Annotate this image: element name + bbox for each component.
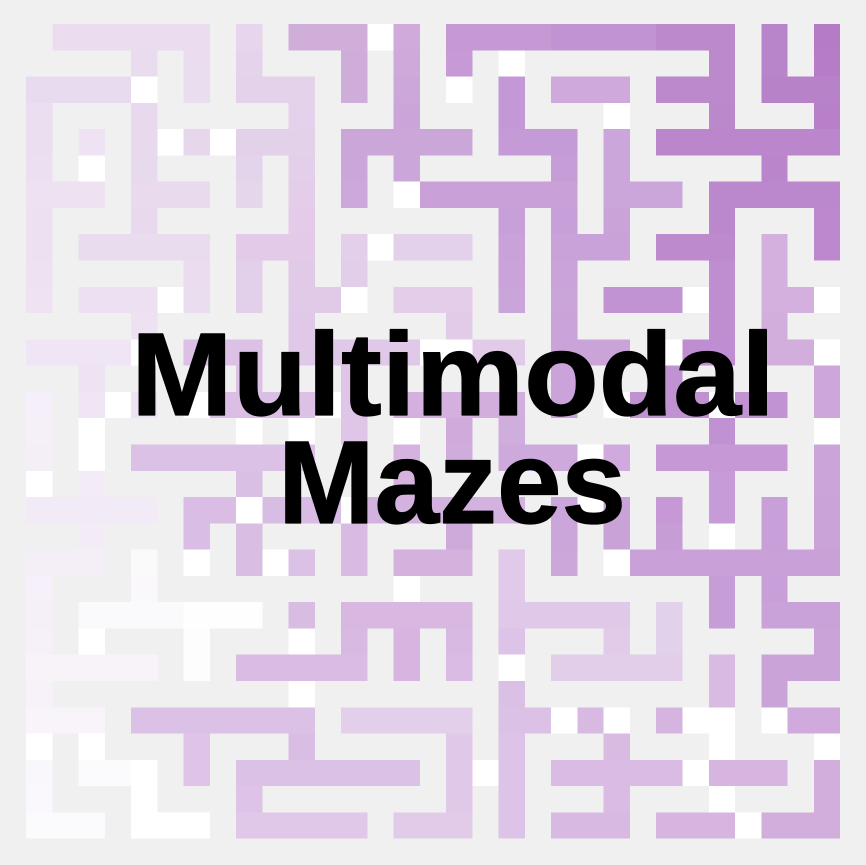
maze row 4: [26, 103, 840, 129]
maze row 23: [26, 602, 840, 628]
maze row 2: [131, 50, 840, 77]
maze row 15: [26, 392, 840, 418]
maze row 14: [79, 366, 840, 392]
title line 2: Mazes: [278, 417, 626, 549]
maze row 6: [26, 155, 788, 182]
title: [131, 309, 775, 549]
maze row 24: [26, 628, 840, 655]
maze row 22: [26, 576, 788, 602]
maze row 9: [26, 234, 840, 261]
maze row 20: [79, 523, 840, 550]
maze row 19: [26, 497, 840, 523]
maze row 26: [26, 681, 788, 707]
maze row 13: [26, 339, 840, 366]
maze row 29: [26, 760, 840, 786]
maze row 10: [26, 261, 788, 287]
maze row 1: [52, 24, 840, 50]
maze row 30: [26, 786, 840, 812]
maze row 31: [26, 812, 840, 839]
maze row 28: [26, 734, 840, 760]
maze row 27: [26, 707, 840, 734]
maze row 7: [26, 182, 840, 208]
maze row 11: [26, 287, 840, 313]
maze row 3: [26, 77, 840, 103]
maze row 12: [131, 313, 788, 339]
maze row 25: [26, 655, 840, 681]
maze row 21: [26, 550, 840, 576]
maze row 17: [26, 444, 840, 471]
maze row 5: [26, 129, 840, 155]
title line 1: Multimodal: [131, 309, 775, 441]
maze row 18: [26, 471, 840, 497]
maze row 16: [26, 418, 840, 444]
maze row 8: [26, 208, 840, 234]
